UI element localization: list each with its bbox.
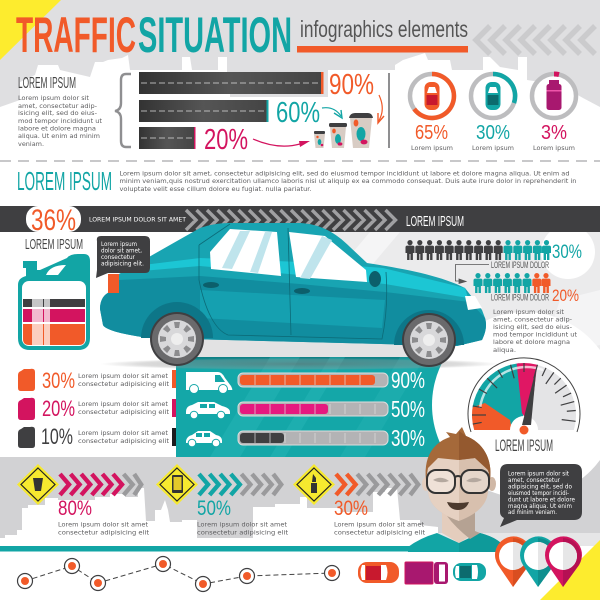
people row 20%: LOREM IPSUM DOLOR xyxy=(491,292,549,302)
people row 20% xyxy=(474,273,579,305)
fuel row 20%: consectetur adipisicing elit xyxy=(78,408,170,416)
header bar xyxy=(0,206,600,232)
speech bubble: person xyxy=(500,464,582,527)
hair xyxy=(426,427,490,480)
speech bubble: fuel: adipisicing elit. xyxy=(101,260,144,268)
panel: lorem ipsum intro xyxy=(18,75,102,148)
fuel can heading: LOREM IPSUM xyxy=(25,236,83,253)
glasses xyxy=(427,470,489,493)
donut: 30% teal car: Lorem ipsum xyxy=(472,144,514,152)
icon: large coffee cup xyxy=(349,113,373,148)
people paragraph: aliqua. xyxy=(493,346,516,354)
bar 50% xyxy=(238,396,425,422)
people paragraph: labore et dolore magna xyxy=(493,338,570,346)
speech bubble: person: amet, consectetur xyxy=(508,477,561,484)
speech bubble: fuel: dolor sit amet, xyxy=(101,248,142,254)
fuel row 30%: Lorem ipsum dolor sit amet xyxy=(78,372,168,380)
door lines xyxy=(199,224,387,339)
value 80%: 80% xyxy=(58,497,92,520)
donut: 65% red car xyxy=(410,74,454,152)
speech bubble: person: eiusmod tempor incidi- xyxy=(508,490,569,497)
sign: phone xyxy=(156,464,198,505)
section paragraph xyxy=(120,170,576,193)
fuel row 20% xyxy=(18,396,176,421)
value 50%: 50% xyxy=(197,497,231,520)
section paragraph: voluptate velit esse cillum dolore eu fugiat. nulla pariatur. xyxy=(120,185,312,193)
speech bubble: fuel: Lorem ipsum xyxy=(101,241,137,248)
donut: 30% teal car: 30% xyxy=(476,122,510,144)
fuel row 10% xyxy=(18,424,176,449)
vertical divider xyxy=(388,73,390,148)
donut: 3% fuel bottle xyxy=(532,74,576,152)
road bar chart xyxy=(139,69,374,156)
people paragraph xyxy=(493,308,577,354)
value 30%: 30% xyxy=(334,497,368,520)
title: SITUATION xyxy=(138,7,292,63)
icon: teal car top view xyxy=(453,563,486,581)
speech bubble: person: dunt ut labore et dolore xyxy=(508,496,575,504)
donut: 3% fuel bottle: 3% xyxy=(541,122,567,144)
caption 80%: consectetur adipisicing elit xyxy=(58,528,150,536)
header label: LOREM IPSUM DOLOR SIT AMET xyxy=(89,216,186,224)
speech bubble: person: adipisicing elit, sed do xyxy=(508,484,572,490)
bar 30% xyxy=(238,425,425,451)
pin orange xyxy=(495,536,532,587)
people row 30%: LOREM IPSUM DOLOR xyxy=(491,260,549,270)
wheel arches xyxy=(141,302,464,345)
sign: lipstick xyxy=(293,464,335,505)
speedometer gauge xyxy=(465,355,580,434)
header chevrons xyxy=(186,210,396,230)
chevrons 80% xyxy=(60,474,141,495)
rear wheel xyxy=(150,312,204,366)
arrow: pink xyxy=(253,139,310,147)
people paragraph: Lorem ipsum dolor sit xyxy=(493,308,564,316)
people paragraph: amet, consectetur adip- xyxy=(493,316,572,324)
icon: hatchback xyxy=(186,431,222,447)
route stops xyxy=(18,556,340,592)
fuel row 30% xyxy=(18,368,176,393)
badge 36%: 36% xyxy=(31,204,76,237)
bar 50%: 50% xyxy=(391,396,425,422)
curly brace xyxy=(115,74,131,147)
headlight xyxy=(465,296,482,310)
icon: small coffee cup xyxy=(314,131,325,148)
intro paragraph xyxy=(18,94,102,148)
arrow: teal xyxy=(322,108,342,118)
rear window xyxy=(210,229,281,276)
section paragraph: Lorem ipsum dolor sit amet, consectetur adipisicing elit, sed do eiusmod tempor incididunt ut labore et dolore magna aliqua. Ut enim ad xyxy=(120,170,570,178)
car shadow xyxy=(100,358,500,370)
chevrons 50% xyxy=(199,474,281,495)
arrow: orange xyxy=(378,95,384,123)
fuel row 10%: consectetur adipisicing elit xyxy=(78,437,170,445)
caption 50%: Lorem ipsum dolor sit amet xyxy=(197,520,287,528)
front window xyxy=(289,232,367,282)
teal baseline bar xyxy=(0,546,500,552)
intro paragraph: isicing elit, sed do eius- xyxy=(18,109,97,117)
speech bubble: person: magna aliqua. Ut enim xyxy=(508,503,572,510)
pin pink xyxy=(545,536,582,587)
panel: vehicle usage xyxy=(176,357,450,457)
taillight xyxy=(108,274,119,293)
gray band with skyline xyxy=(0,457,600,546)
bar 90% xyxy=(238,367,425,393)
illustration: car xyxy=(100,223,486,367)
speech bubble: fuel xyxy=(96,236,150,278)
intro paragraph: labore et dolore magna xyxy=(18,124,96,132)
caption 50%: consectetur adipisicing elit xyxy=(197,528,289,536)
people chart xyxy=(406,240,582,354)
intro paragraph: aliqua. Ut enim ad minim xyxy=(18,132,100,140)
front wheel xyxy=(402,313,456,367)
panel: fuel shares xyxy=(18,368,176,449)
pin teal xyxy=(520,536,557,587)
icon: van xyxy=(186,372,232,394)
fuel row 20%: Lorem ipsum dolor sit amet xyxy=(78,400,168,408)
intro paragraph: veniam. xyxy=(18,140,44,148)
speech bubble: person: ad minim veniam. xyxy=(508,509,557,516)
people paragraph: mod tempor incididunt ut xyxy=(493,330,577,338)
intro paragraph: mod tempor incididunt ut xyxy=(18,117,102,125)
intro paragraph: amet, consectetur adip- xyxy=(18,102,97,110)
sign: coffee xyxy=(17,464,59,505)
bar 90%: 90% xyxy=(391,367,425,393)
value 60%: 60% xyxy=(276,97,320,129)
section paragraph: minim veniam,quis nostrud exercitation ullamco laboris nisi ut aliquip ex ea commodo consequat. Duis aute irure dolor in reprehenderit in xyxy=(120,177,576,185)
subtitle underline xyxy=(297,46,468,52)
people row 20%: 20% xyxy=(552,286,579,305)
map pins xyxy=(495,536,582,587)
route line xyxy=(18,556,340,592)
top chevrons xyxy=(476,26,595,54)
caption 30% xyxy=(334,520,426,536)
eyes xyxy=(433,478,482,482)
road 60% xyxy=(139,100,268,122)
caption 80%: Lorem ipsum dolor sit amet xyxy=(58,520,148,528)
speech bubble: person: Lorem ipsum dolor sit xyxy=(508,470,570,478)
illustration: person xyxy=(408,427,502,552)
icon: medium coffee cup xyxy=(329,123,347,148)
icon: fuel can xyxy=(18,254,90,350)
intro heading: LOREM IPSUM xyxy=(18,75,76,92)
speech bubble: fuel: consectetur xyxy=(101,254,136,261)
caption 80% xyxy=(58,520,150,536)
bar 30%: 30% xyxy=(391,425,425,451)
value 90%: 90% xyxy=(329,69,374,101)
title: TRAFFIC xyxy=(16,7,136,63)
door handles xyxy=(203,282,310,294)
yellow corner triangle xyxy=(0,0,61,60)
fuel row 10%: 10% xyxy=(41,424,73,449)
intro paragraph: Lorem ipsum dolor sit xyxy=(18,94,89,102)
header right label: LOREM IPSUM xyxy=(406,213,464,230)
road 90% xyxy=(139,72,324,94)
connector arrow xyxy=(456,264,489,284)
icon: magenta truck top view xyxy=(405,562,448,584)
fuel row 30%: consectetur adipisicing elit xyxy=(78,380,170,388)
fuel row 10%: Lorem ipsum dolor sit amet xyxy=(78,429,168,437)
chevrons 30% xyxy=(336,474,418,495)
icon: orange car top view xyxy=(358,562,399,583)
fuel row 30%: 30% xyxy=(42,368,75,393)
section heading: LOREM IPSUM xyxy=(17,166,112,196)
donut: 65% red car: Lorem ipsum xyxy=(411,144,453,152)
floor band under car xyxy=(176,340,446,357)
caption 30%: consectetur adipisicing elit xyxy=(334,528,426,536)
value 20%: 20% xyxy=(204,124,248,156)
yellow corner triangle bottom xyxy=(540,540,600,600)
people paragraph: isicing elit, sed do eius- xyxy=(493,323,572,331)
donut: 30% teal car xyxy=(471,74,515,152)
mirror xyxy=(369,271,381,287)
donut: 65% red car: 65% xyxy=(415,122,448,144)
people row 30% xyxy=(406,240,582,270)
subtitle: infographics elements xyxy=(300,16,468,42)
caption 50% xyxy=(197,520,289,536)
caption 30%: Lorem ipsum dolor sit amet xyxy=(334,520,424,528)
donut: 3% fuel bottle: Lorem ipsum xyxy=(533,144,575,152)
fuel row 20%: 20% xyxy=(42,396,75,421)
mouth xyxy=(447,502,469,510)
people row 30%: 30% xyxy=(552,242,582,263)
icon: sedan xyxy=(186,402,230,419)
road 20% xyxy=(139,127,196,149)
